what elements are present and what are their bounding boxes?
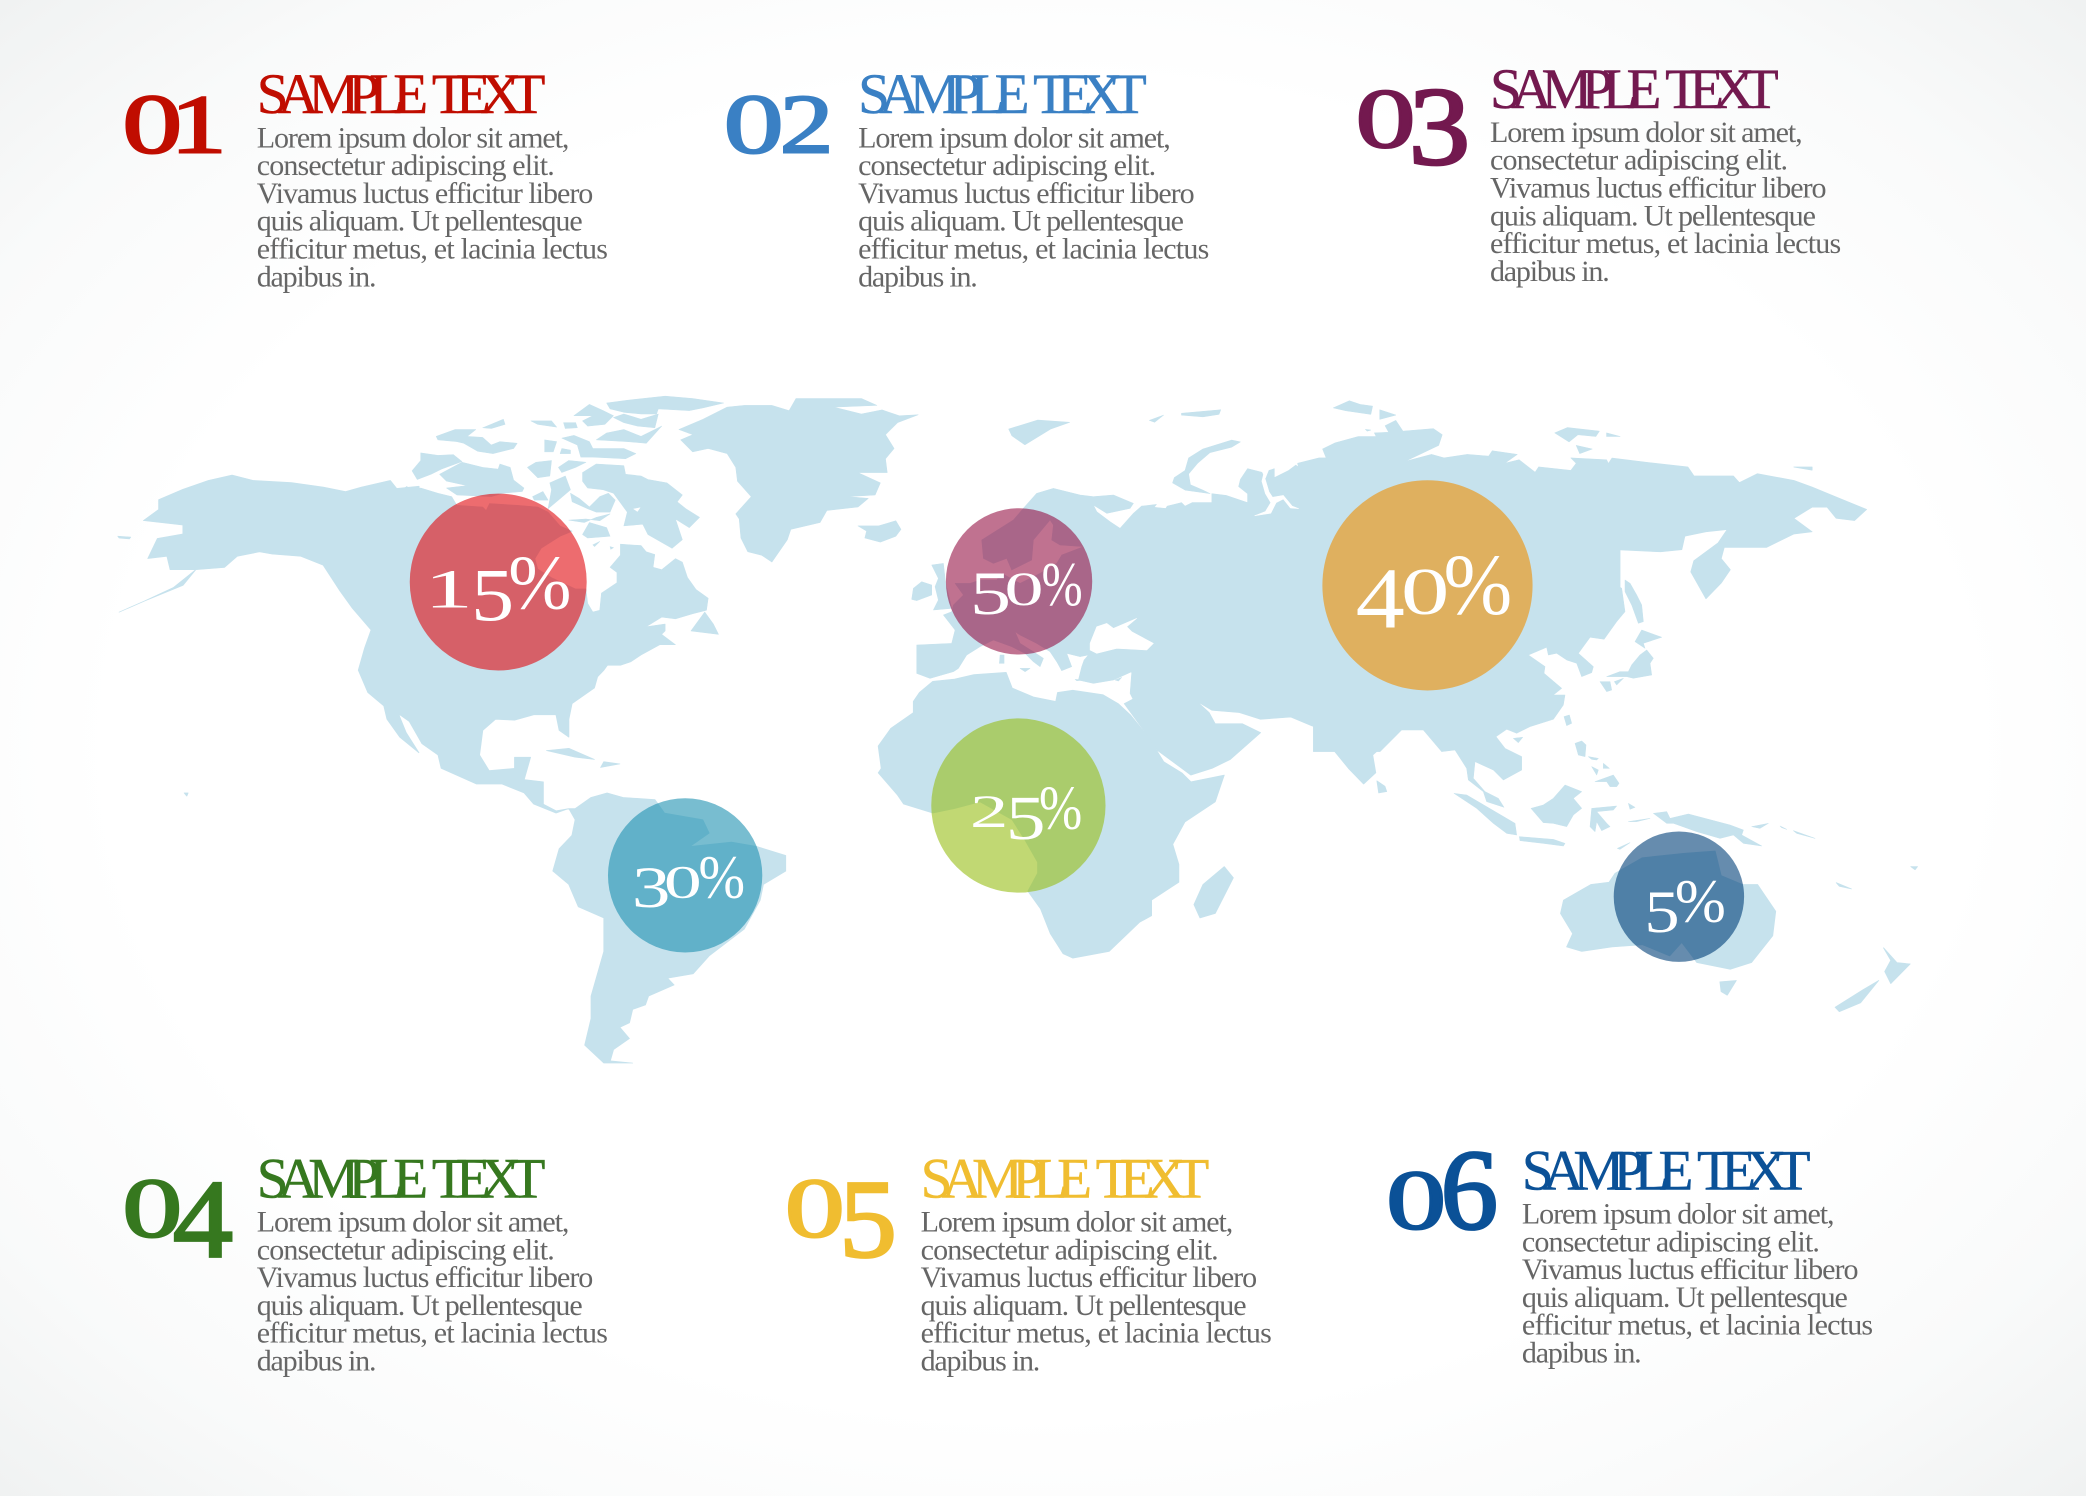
circle: 50% over Europe: 0: [1004, 562, 1044, 615]
body 02: efficitur metus, et lacinia lectus: [858, 231, 1209, 265]
text block 03: [1356, 57, 1841, 288]
body 02: dapibus in.: [858, 259, 978, 293]
map: northern Russia and Arctic Ocean islands: [1142, 401, 1620, 604]
number 06: [1386, 1127, 1499, 1254]
body 02: [858, 120, 1209, 293]
circle: 40% over Asia: 4: [1356, 550, 1406, 646]
text block 01: [122, 63, 608, 293]
map: Americas mainland and Caribbean: [118, 420, 1069, 1063]
body 02: Vivamus luctus efficitur libero: [858, 176, 1195, 210]
map: Asian core, Arabia, Africa, Australia and Oceania: [878, 458, 1917, 1012]
heading and body 02: [858, 63, 1209, 293]
circle: 25% over Africa: 5: [1005, 783, 1045, 852]
heading 06: SAMPLE TEXT: [1522, 1139, 1811, 1202]
circle: 30% over South America: 3: [632, 854, 670, 919]
number 01: 1: [171, 78, 227, 171]
body 04: quis aliquam. Ut pellentesque: [257, 1288, 583, 1322]
number 05: 5: [840, 1157, 897, 1281]
body 01: efficitur metus, et lacinia lectus: [257, 231, 608, 265]
body 06: dapibus in.: [1522, 1336, 1642, 1370]
body 06: consectetur adipiscing elit.: [1522, 1224, 1820, 1258]
text block 05: [785, 1147, 1272, 1378]
circle: 40% over Asia: [1323, 480, 1533, 690]
number 04: 0: [122, 1161, 182, 1255]
heading 03: SAMPLE TEXT: [1490, 57, 1779, 120]
heading and body 06: [1522, 1139, 1873, 1370]
circle: 25% over Africa: 2: [970, 786, 1009, 837]
map: Europe and British Isles: [912, 488, 1213, 700]
body 03: dapibus in.: [1490, 253, 1610, 287]
circle: 5% over Australia: %: [1675, 868, 1726, 935]
body 04: Vivamus luctus efficitur libero: [257, 1260, 593, 1294]
number 02: [724, 77, 833, 171]
circle: 15% over North America: 1: [424, 559, 473, 620]
number 05: 0: [785, 1161, 845, 1255]
body 03: consectetur adipiscing elit.: [1490, 142, 1788, 176]
number 04: [122, 1157, 233, 1281]
heading 05: SAMPLE TEXT: [921, 1147, 1209, 1210]
body 01: Vivamus luctus efficitur libero: [257, 176, 593, 210]
number 01: [122, 77, 227, 171]
body 05: consectetur adipiscing elit.: [921, 1232, 1219, 1266]
circle: 25% over Africa: [931, 718, 1106, 893]
body 03: quis aliquam. Ut pellentesque: [1490, 198, 1816, 232]
number 02: 0: [724, 77, 784, 171]
body 06: Vivamus luctus efficitur libero: [1522, 1252, 1859, 1286]
body 05: efficitur metus, et lacinia lectus: [921, 1316, 1272, 1350]
circle: 5% over Australia: [1614, 831, 1744, 961]
number 04: 4: [173, 1157, 233, 1281]
number 03: [1356, 65, 1470, 189]
body 04: dapibus in.: [257, 1344, 376, 1378]
body 06: efficitur metus, et lacinia lectus: [1522, 1308, 1873, 1342]
heading 04: SAMPLE TEXT: [257, 1147, 545, 1210]
body 01: consectetur adipiscing elit.: [257, 148, 555, 182]
number 03: 3: [1409, 65, 1470, 189]
body 05: Lorem ipsum dolor sit amet,: [921, 1205, 1233, 1239]
number 06: 0: [1386, 1153, 1446, 1247]
circle: 5% over Australia: 5: [1645, 879, 1680, 945]
heading 02: SAMPLE TEXT: [858, 63, 1147, 126]
body 05: dapibus in.: [921, 1344, 1040, 1378]
body 03: Lorem ipsum dolor sit amet,: [1490, 114, 1803, 148]
circle: 30% over South America: [608, 798, 762, 953]
text block 02: [724, 63, 1209, 293]
body 04: efficitur metus, et lacinia lectus: [257, 1316, 608, 1350]
body 05: Vivamus luctus efficitur libero: [921, 1260, 1257, 1294]
heading and body 04: [257, 1147, 608, 1378]
circle: 50% over Europe: %: [1041, 549, 1082, 619]
body 04: consectetur adipiscing elit.: [257, 1232, 555, 1266]
body 04: [257, 1205, 608, 1378]
body 02: consectetur adipiscing elit.: [858, 148, 1156, 182]
circle: 40% over Asia: 0: [1401, 555, 1450, 628]
number 02: 2: [779, 77, 833, 171]
circle: 15% over North America: 5: [470, 554, 514, 637]
body 05: quis aliquam. Ut pellentesque: [921, 1288, 1247, 1322]
circle: 15% over North America: [409, 493, 586, 670]
body 06: Lorem ipsum dolor sit amet,: [1522, 1197, 1835, 1231]
number 01: 0: [122, 77, 182, 171]
body 06: quis aliquam. Ut pellentesque: [1522, 1280, 1848, 1314]
circle: 30% over South America: %: [698, 843, 744, 911]
number 05: [785, 1157, 897, 1281]
circle: 50% over Europe: [946, 508, 1092, 655]
number 06: 6: [1441, 1127, 1499, 1254]
text block 06: [1386, 1127, 1873, 1370]
circle: 15% over North America: %: [509, 540, 572, 626]
text block 04: [122, 1147, 608, 1378]
body 01: quis aliquam. Ut pellentesque: [257, 204, 583, 238]
body 05: [921, 1205, 1272, 1378]
body 04: Lorem ipsum dolor sit amet,: [257, 1205, 569, 1239]
circle: 30% over South America: 0: [663, 856, 701, 908]
heading and body 01: [257, 63, 608, 293]
circle: 25% over Africa: %: [1038, 773, 1082, 842]
circle: 50% over Europe: 5: [970, 559, 1011, 627]
body 02: Lorem ipsum dolor sit amet,: [858, 120, 1171, 154]
map: East and Southeast Asia: [1313, 560, 1815, 849]
heading and body 05: [920, 1147, 1272, 1378]
body 03: Vivamus luctus efficitur libero: [1490, 170, 1827, 204]
heading 01: SAMPLE TEXT: [257, 63, 545, 126]
number 03: 0: [1356, 71, 1416, 165]
body 01: Lorem ipsum dolor sit amet,: [257, 120, 569, 154]
circle: 40% over Asia: %: [1444, 537, 1513, 633]
body 01: [257, 120, 608, 293]
body 02: quis aliquam. Ut pellentesque: [858, 204, 1184, 238]
body 03: efficitur metus, et lacinia lectus: [1490, 226, 1841, 260]
body 01: dapibus in.: [257, 259, 376, 293]
body 06: [1522, 1197, 1873, 1370]
map: northern Canada, Arctic islands, Greenland and Iceland: [400, 396, 918, 665]
body 03: [1490, 114, 1841, 287]
heading and body 03: [1490, 57, 1841, 288]
